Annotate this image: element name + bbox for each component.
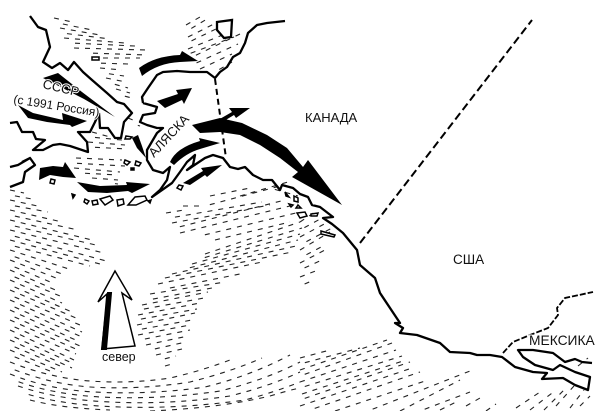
label: USSR: СССР — [41, 76, 81, 99]
border: USA and Mexico — [503, 292, 593, 353]
arrow: main route to North America coast — [192, 118, 342, 205]
arrow: along Aleutians — [77, 182, 150, 193]
coastline: Chukotka — [30, 16, 132, 138]
label: Canada: КАНАДА — [305, 110, 358, 125]
arrow: north indicator — [98, 271, 135, 349]
arrow: Kamchatka curve — [39, 162, 76, 180]
arrow: inner Alaska — [157, 88, 192, 108]
arrow: branch into Canada — [218, 108, 250, 121]
sea hatching: Arctic Ocean, east — [186, 17, 240, 72]
sea hatching: North Pacific, bottom band — [10, 355, 300, 411]
coastline: Kamchatka — [10, 113, 99, 152]
arrow: across Arctic to Canada — [139, 51, 198, 76]
label: Russia since 1991: (с 1991 Россия) — [13, 92, 100, 120]
coastline: Sea of Okhotsk shore — [10, 158, 35, 187]
sea hatching: North Pacific, upper centre — [166, 182, 300, 240]
label: north: север — [102, 350, 136, 364]
arrow: Alaska peninsula — [183, 165, 222, 185]
sea hatching: coast south of Alaska — [300, 212, 332, 286]
border: Canada and USA — [360, 20, 532, 243]
arrow: CCCP north route — [43, 73, 115, 117]
arrow: Alaska south coast — [170, 138, 220, 165]
arrow: Bering Strait southward — [132, 135, 146, 158]
sea hatching: southeast Pacific — [300, 340, 470, 411]
sea hatching: North Pacific, centre — [136, 222, 302, 366]
islands — [50, 20, 335, 237]
sea hatching: Bering Sea — [72, 118, 140, 184]
border: Alaska and Canada — [215, 79, 226, 158]
coastline: Alaska and Pacific coast — [140, 21, 592, 390]
label: Mexico: МЕКСИКА — [529, 333, 595, 348]
label: USA: США — [453, 252, 484, 267]
sea hatching: Arctic Ocean, west — [54, 18, 146, 98]
sea hatching: off Mexico — [466, 358, 590, 411]
arrow: CCCP south route — [18, 105, 87, 127]
sea hatching: North Pacific, west — [10, 190, 110, 373]
label: Alaska: АЛЯСКА — [145, 111, 192, 160]
